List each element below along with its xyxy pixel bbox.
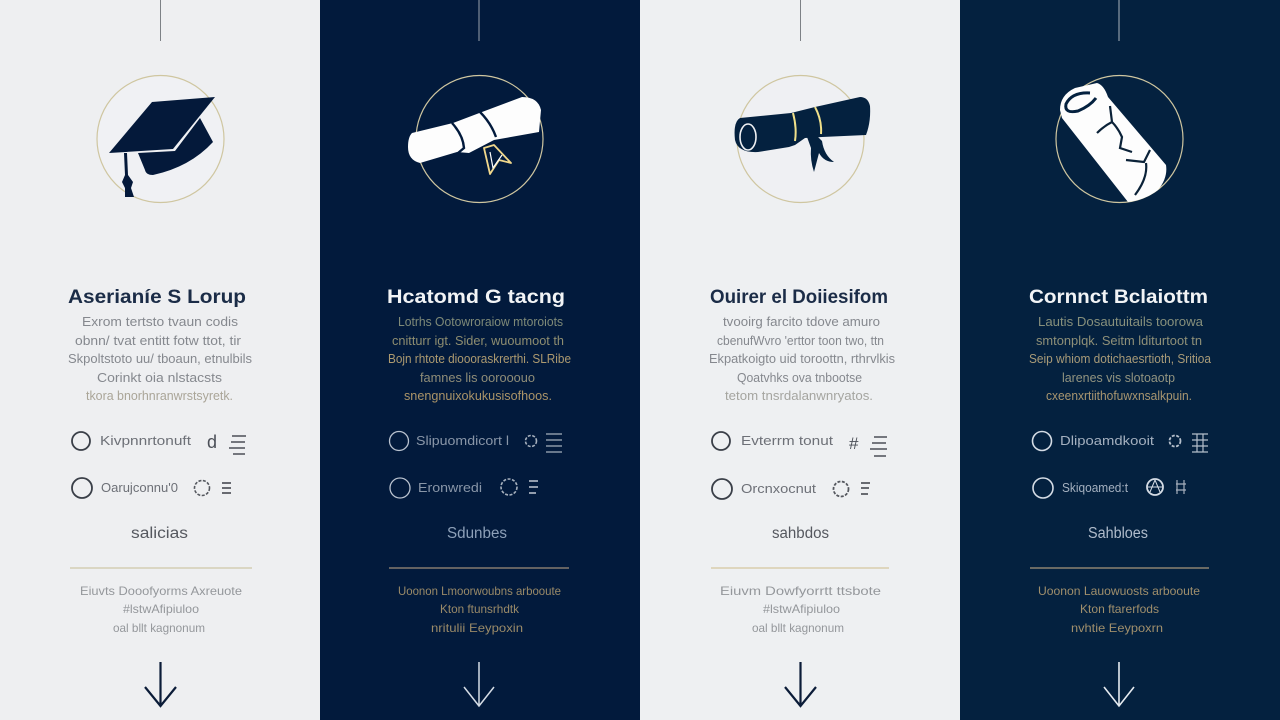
description text — [1029, 315, 1211, 403]
subheading: sahbdos — [772, 525, 829, 542]
divider rule — [711, 567, 889, 569]
description text: Ekpatkoigto uid toroottn, rthrvlkis — [709, 352, 895, 366]
icon: white diploma in circle — [408, 76, 543, 202]
arrow — [785, 662, 816, 706]
description text: Bojn rhtote dioooraskrerthi. SLRibe — [388, 352, 571, 366]
description text: Lautis Dosautuitails toorowa — [1038, 315, 1203, 329]
description text: Lotrhs Ootowroraiow mtoroiots — [398, 315, 563, 329]
feature row 1 — [72, 432, 246, 454]
heading: Cornnct Bclaiottm — [1029, 287, 1208, 308]
subheading: Sahbloes — [1088, 525, 1148, 542]
description text: obnn/ tvat entitt fotw ttot, tir — [75, 334, 241, 348]
feature row 2: Orcnxocnut — [741, 481, 816, 496]
description text: snengnuixokukusisofhoos. — [404, 389, 552, 403]
subheading: salicias — [131, 525, 188, 542]
description text: Qoatvhks ova tnbootse — [737, 371, 862, 385]
feature row 1: Kivpnnrtonuft — [100, 433, 191, 448]
description text: Seip whiom dotichaesrtioth, Sritioa — [1029, 352, 1211, 366]
divider rule — [389, 567, 569, 569]
footer text: Kton ftunsrhdtk — [440, 602, 520, 616]
feature row 1 — [712, 432, 887, 456]
description text — [388, 315, 571, 403]
footer text: nvhtie Eeypoxrn — [1071, 621, 1163, 635]
feature row 1: Dlipoamdkooit — [1060, 433, 1154, 448]
description text — [709, 315, 895, 403]
feature row 1: Evterrm tonut — [741, 433, 833, 448]
description text: tetom tnsrdalanwnryatos. — [725, 389, 873, 403]
feature row 2 — [72, 478, 231, 498]
description text: Skpoltstoto uu/ tboaun, etnulbils — [68, 352, 252, 366]
feature row 2 — [712, 479, 870, 499]
footer text: Kton ftarerfods — [1080, 602, 1159, 616]
arrow — [464, 662, 494, 706]
heading: Ouirer el Doiiesifom — [710, 287, 888, 308]
description text: Corinkt oia nlstacsts — [97, 371, 222, 385]
panel: column 1 — [0, 0, 320, 720]
description text: cbenufWvro 'erttor toon two, ttn — [717, 334, 884, 348]
footer text: #lstwAfipiuloo — [763, 602, 840, 616]
description text: famnes lis oorooouo — [420, 371, 535, 385]
connector line — [160, 0, 162, 41]
footer text — [1038, 584, 1200, 635]
feature row 1: d — [207, 432, 217, 452]
footer text — [720, 584, 881, 635]
arrow — [145, 662, 176, 706]
feature row 2: Eronwredi — [418, 480, 482, 495]
footer text: Uoonon Lauowuosts arbooute — [1038, 584, 1200, 598]
feature row 1: Slipuomdicort l — [416, 433, 509, 448]
description text: tkora bnorhnranwrstsyretk. — [86, 389, 233, 403]
feature row 1 — [390, 432, 562, 452]
description text: cnitturr igt. Sider, wuoumoot th — [392, 334, 564, 348]
footer text: oal bllt kagnonum — [752, 621, 844, 635]
divider rule — [70, 567, 252, 569]
feature row 1: # — [849, 434, 859, 453]
connector line — [478, 0, 480, 41]
description text: tvooirg farcito tdove amuro — [723, 315, 880, 329]
connector line — [1118, 0, 1120, 41]
description text: cxeenxrtiithofuwxnsalkpuin. — [1046, 389, 1192, 403]
feature row 2 — [1033, 478, 1186, 498]
heading: Aserianíe S Lorup — [68, 287, 246, 308]
footer text: #lstwAfipiuloo — [123, 602, 199, 616]
feature row 2: Oarujconnu'0 — [101, 480, 178, 495]
icon: navy diploma in circle — [735, 76, 870, 202]
footer text: nritulii Eeypoxin — [431, 621, 523, 635]
connector line — [800, 0, 802, 41]
footer text — [398, 584, 561, 635]
icon: graduation cap in circle — [97, 76, 224, 202]
divider rule — [1030, 567, 1209, 569]
arrow — [1104, 662, 1134, 706]
feature row 2: Skiqoamed:t — [1062, 480, 1128, 495]
description text: Exrom tertsto tvaun codis — [82, 315, 238, 329]
description text: larenes vis slotoaotp — [1062, 371, 1175, 385]
footer text: Uoonon Lmoorwoubns arbooute — [398, 584, 561, 598]
heading: Hcatomd G tacng — [387, 287, 565, 308]
description text — [68, 315, 252, 403]
footer text: oal bllt kagnonum — [113, 621, 205, 635]
subheading: Sdunbes — [447, 525, 507, 542]
feature row 2 — [390, 478, 538, 498]
panel: column 3 — [640, 0, 960, 720]
feature row 1 — [1032, 432, 1208, 452]
icon: unrolled scroll in circle — [1056, 76, 1183, 202]
footer text: Eiuvts Dooofyorms Axreuote — [80, 584, 242, 598]
description text: smtonplqk. Seitm lditurtoot tn — [1036, 334, 1202, 348]
footer text: Eiuvm Dowfyorrtt ttsbote — [720, 584, 881, 598]
footer text — [80, 584, 242, 635]
panel: column 2 — [320, 0, 640, 720]
panel: column 4 — [960, 0, 1280, 720]
